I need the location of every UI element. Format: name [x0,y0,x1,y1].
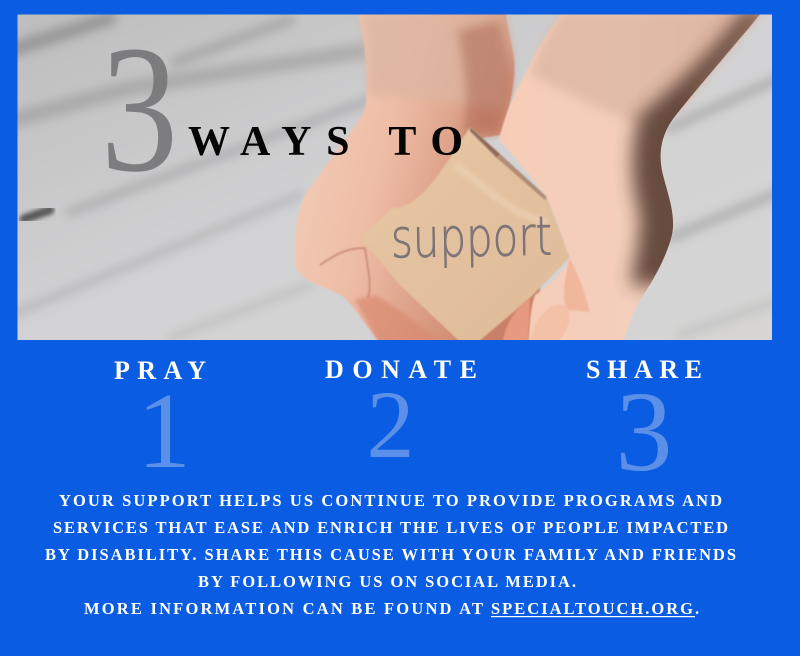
number 3: 3 [616,368,672,495]
label: share: SHARE [586,355,702,384]
cardboard sign [360,127,570,342]
link: specialtouch.org: SPECIALTOUCH.ORG [491,599,693,618]
label: pray: PRAY [114,356,206,385]
body text: SERVICES THAT EASE AND ENRICH THE LIVES OF PEOPLE IMPACTED [53,518,728,537]
body text: . [695,599,699,618]
number 2: 2 [366,371,414,478]
column: share [586,355,702,495]
left hand [294,12,540,345]
column: pray [114,356,206,491]
headline: ways to: WAYS TO [188,119,463,165]
body text: MORE INFORMATION CAN BE FOUND AT [84,599,483,618]
body text: BY DISABILITY. SHARE THIS CAUSE WITH YOUR FAMILY AND FRIENDS [45,545,736,564]
body text: BY FOLLOWING US ON SOCIAL MEDIA. [198,572,576,591]
label: donate: DONATE [325,355,477,384]
wood plank background [5,14,780,341]
right hand [499,10,770,345]
column: donate [325,355,477,478]
body text [45,491,736,618]
handwritten word: support: support [390,205,552,270]
body text: YOUR SUPPORT HELPS US CONTINUE TO PROVIDE PROGRAMS AND [59,491,722,510]
numeral 3 in headline: 3 [101,7,178,210]
photo: hands holding a cardboard support sign [5,7,780,345]
number 1: 1 [137,372,191,491]
